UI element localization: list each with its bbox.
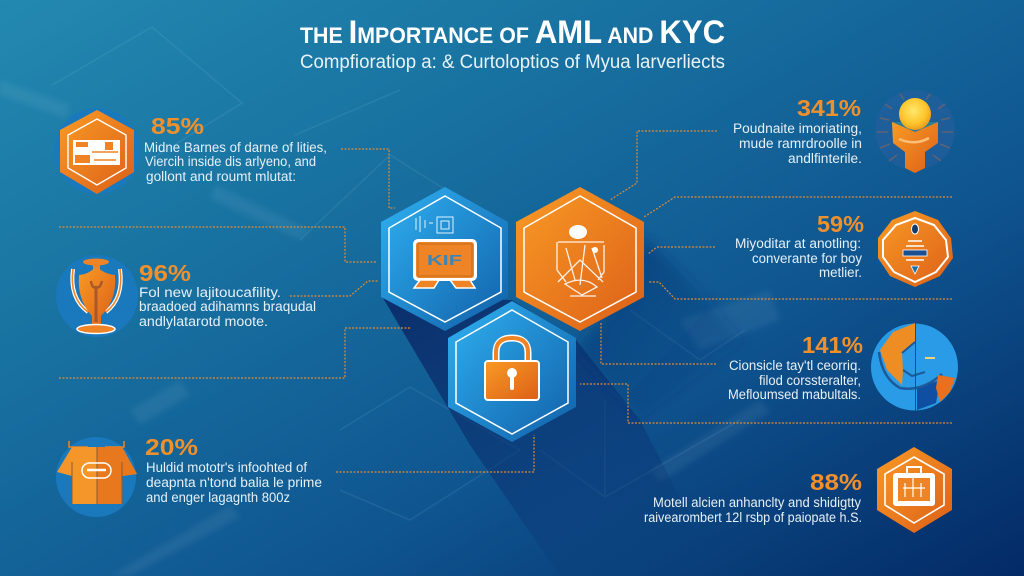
subtitle: Compfioratiop a: & Curtoloptios of Myua larverliects [300, 52, 725, 73]
description [139, 285, 316, 329]
description: Cionsicle tay'tl ceorriq. [729, 358, 861, 373]
icon: trophy [56, 255, 138, 337]
description: Mefloumsed mabultals. [728, 387, 861, 402]
description: Poudnaite imoriating, [733, 121, 862, 136]
description [644, 495, 862, 525]
panel: 88% stat [644, 447, 952, 533]
icon: orange jacket [56, 437, 137, 517]
icon: octagonal badge [878, 211, 953, 287]
icon: orange hexagon badge [54, 108, 140, 194]
description: mude ramrdroolle in [739, 136, 862, 151]
description [146, 460, 322, 505]
blue hexagon: padlock [448, 301, 576, 442]
icon: glowing sun lamp [875, 90, 955, 173]
description [735, 236, 862, 280]
stat value: 59% [817, 211, 864, 237]
description: and enger lagagnth 800z [146, 490, 290, 505]
description: filod corssteralter, [759, 373, 861, 388]
panel: 141% stat [728, 323, 958, 410]
stat value: 96% [139, 260, 191, 286]
description: converante for boy [752, 251, 862, 266]
description: Viercih inside dis arlyeno, and [145, 154, 316, 169]
description: Fol new lajitoucafility. [139, 285, 281, 300]
dotted connector lines [59, 131, 952, 472]
orange hexagon: emblem [516, 187, 644, 331]
description [144, 140, 327, 184]
description: deapnta n'tond balia le prime [146, 475, 322, 490]
blue hexagon: monitor [381, 187, 508, 331]
description: andlfinterile. [788, 151, 862, 166]
icon: globe [871, 323, 958, 410]
description: metlier. [819, 265, 862, 280]
stat value: 341% [797, 95, 861, 121]
stat value: 141% [802, 332, 863, 358]
description: Huldid mototr's infoohted of [146, 460, 307, 475]
description [728, 358, 861, 402]
description: braadoed adihamns braqudal [139, 299, 316, 314]
stat value: 85% [151, 113, 204, 139]
title: THE IMPORTANCE OF AML AND KYC [300, 14, 725, 50]
panel: 96% stat [56, 255, 316, 337]
central hexagon cluster [381, 187, 644, 442]
hexagon drop shadow [383, 235, 745, 576]
description: gollont and roumt mlutat: [146, 169, 296, 184]
stat value: 88% [810, 469, 862, 495]
description: Midne Barnes of darne of lities, [144, 140, 327, 155]
description: Miyoditar at anotling: [735, 236, 861, 251]
panel: 341% stat [733, 90, 955, 173]
description: andlylatarotd moote. [139, 314, 268, 329]
description: raivearombert 12l rsbp of paiopate h.S. [644, 510, 862, 525]
panel: 20% stat [56, 434, 322, 517]
description [733, 121, 862, 166]
blue hexagon: monitor: KIF [427, 252, 462, 269]
description: Motell alcien anhanclty and shidigtty [653, 495, 861, 510]
panel: 85% stat [54, 108, 327, 194]
stat value: 20% [145, 434, 198, 460]
panel: 59% stat [735, 211, 953, 287]
icon: hexagon briefcase [877, 447, 952, 533]
